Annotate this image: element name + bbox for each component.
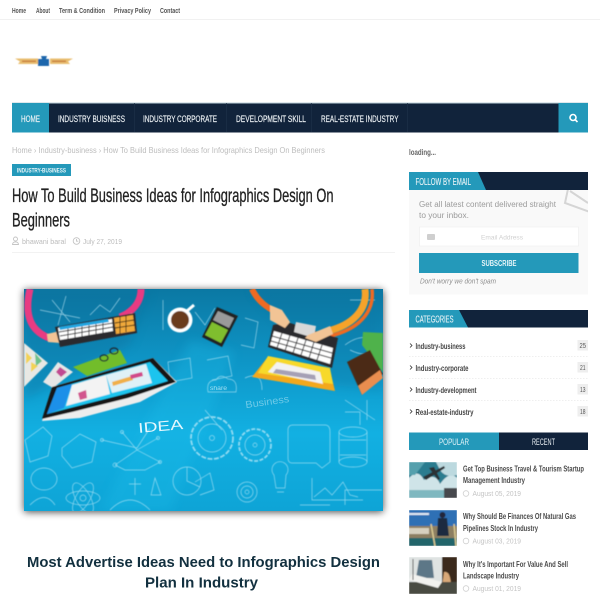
- tabs: popular and recent: POPULAR: [439, 437, 469, 448]
- post 2: Pipelines Stock In Industry: [463, 523, 538, 533]
- main navigation bar: REAL-ESTATE INDUSTRY: [321, 114, 398, 124]
- post meta: author and date: bhawani baral: [22, 237, 66, 246]
- category list: [409, 340, 588, 417]
- top navigation links: Term & Condition: [59, 8, 105, 15]
- tablet: [42, 358, 177, 421]
- thumbnail: pipeline worker: [409, 510, 457, 546]
- icon: search: [570, 114, 578, 122]
- hero illustration: flat-lay workspace with devices and doodles: [24, 289, 383, 516]
- hero image shadow: [24, 290, 383, 512]
- orange arm: [248, 289, 271, 313]
- post 3: [409, 557, 568, 594]
- category list: Industry-business: [416, 341, 466, 351]
- tabs: popular and recent: RECENT: [532, 437, 555, 448]
- category list: Industry-corporate: [416, 363, 469, 373]
- green tablet: [73, 350, 127, 376]
- panel: follow by email: FOLLOW BY EMAIL: [416, 177, 471, 188]
- category list: Real-estate-industry: [416, 407, 474, 417]
- icon: envelope watermark: [565, 189, 590, 212]
- follow description: [419, 200, 557, 220]
- post title: How To Build Business Ideas for Infographics Design On: [12, 186, 334, 207]
- article subheading: Plan In Industry: [145, 574, 259, 592]
- top navigation links: Privacy Policy: [114, 8, 151, 15]
- email input: Email Address: [481, 234, 524, 242]
- logo: [15, 56, 73, 66]
- category list: 21: [580, 363, 586, 372]
- subscribe button: [419, 253, 578, 273]
- coffee cup: [168, 308, 192, 332]
- post meta: author and date: [12, 237, 395, 253]
- hero illustration: flat-lay workspace with devices and doodles: Business: [245, 394, 290, 411]
- phone: [202, 307, 238, 347]
- sidebar loading text: loading...: [409, 148, 436, 157]
- post title: Beginners: [12, 210, 70, 232]
- panel: categories: [409, 310, 588, 417]
- main navigation bar: [12, 102, 588, 132]
- category list: 25: [580, 341, 586, 350]
- left keyboard: [55, 313, 137, 347]
- top navigation links: Contact: [160, 8, 181, 15]
- thumbnail: airplane in sky: [409, 462, 457, 498]
- email input: [420, 227, 578, 246]
- top navigation links: Home: [12, 8, 26, 15]
- category list: 18: [580, 407, 586, 416]
- category list: 13: [580, 385, 586, 394]
- top navigation links: About: [36, 8, 50, 15]
- follow description: Get all latest content delivered straight: [419, 200, 557, 209]
- post 2: [409, 510, 576, 546]
- papers: [24, 343, 48, 387]
- category tag: INDUSTRY-BUSINESS: [17, 168, 66, 174]
- post 1: August 05, 2019: [472, 491, 521, 498]
- post meta: author and date: July 27, 2019: [83, 237, 122, 246]
- article subheading: [27, 554, 380, 592]
- category tag: [12, 164, 71, 176]
- pink arm: [28, 289, 52, 339]
- post 2: August 03, 2019: [472, 538, 521, 546]
- right laptop: [268, 322, 338, 368]
- thumbnail: people with plans: [409, 557, 457, 594]
- panel: follow by email: [409, 172, 590, 294]
- follow description: to your inbox.: [419, 211, 469, 220]
- tabs: popular and recent: [409, 432, 588, 450]
- panel: follow by email: Don't worry we don't spam: [420, 278, 496, 286]
- post 3: August 01, 2019: [472, 586, 521, 593]
- category list: Industry-development: [416, 385, 477, 395]
- main navigation bar: DEVELOPMENT SKILL: [236, 114, 306, 124]
- panel: categories: CATEGORIES: [416, 314, 454, 326]
- main navigation bar: INDUSTRY BUISNESS: [58, 114, 125, 124]
- post 1: [409, 462, 584, 498]
- hero illustration: flat-lay workspace with devices and doodles: IDEA: [137, 416, 185, 436]
- top navigation links: [0, 8, 600, 20]
- main navigation bar: INDUSTRY CORPORATE: [143, 114, 217, 124]
- post title: [12, 186, 334, 232]
- hero illustration: flat-lay workspace with devices and doodles: share: [210, 386, 228, 392]
- article subheading: Most Advertise Ideas Need to Infographics Design: [27, 554, 380, 571]
- books: [362, 332, 383, 372]
- subscribe button: SUBSCRIBE: [482, 259, 517, 268]
- breadcrumb: Home › Industry-business › How To Build Business Ideas for Infographics Design On Beginners: [12, 145, 325, 155]
- doodles: [25, 296, 382, 516]
- main navigation bar: HOME: [21, 114, 40, 124]
- post 1: Management Industry: [463, 475, 525, 485]
- post 3: Landscape Industry: [463, 570, 519, 580]
